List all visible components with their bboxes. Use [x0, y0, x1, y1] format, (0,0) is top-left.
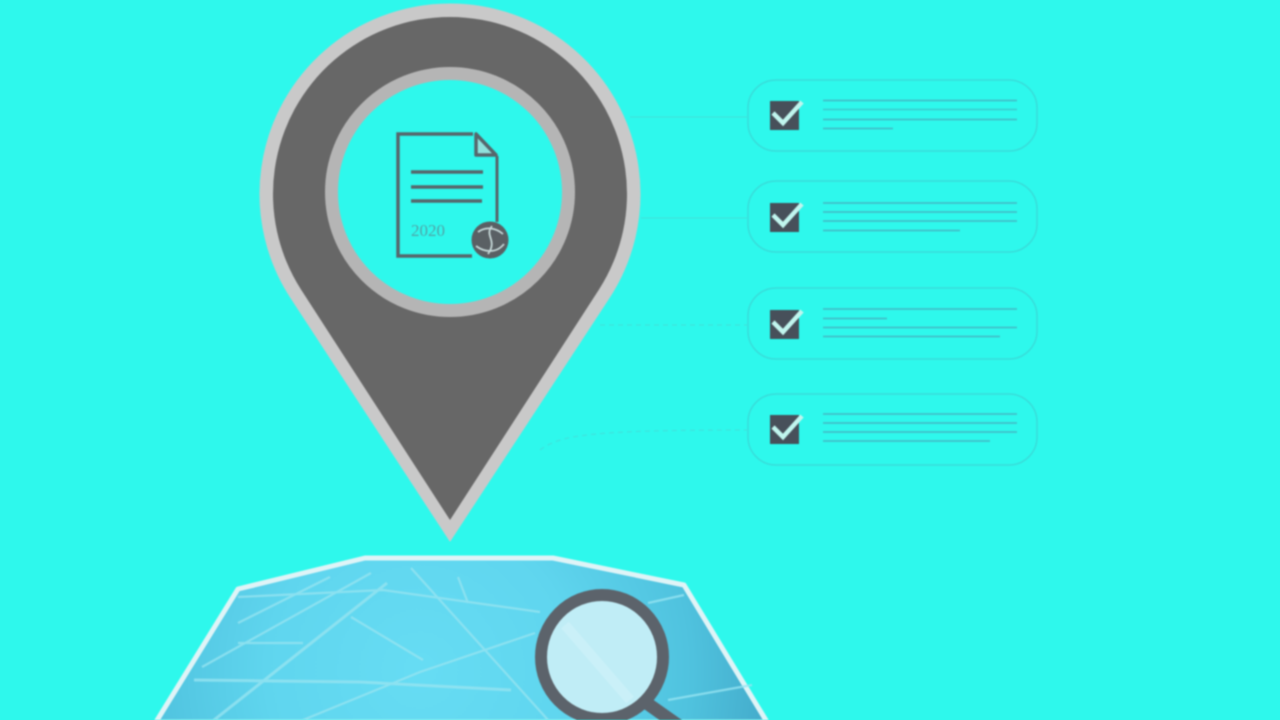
placeholder text lines	[823, 203, 1017, 230]
icon: checkbox	[770, 310, 802, 339]
card outline	[748, 80, 1037, 151]
document year: 2020	[411, 221, 445, 240]
map roads	[194, 568, 752, 720]
placeholder text lines	[823, 414, 1017, 441]
placeholder text lines	[823, 100, 1017, 128]
pin inner ring	[332, 74, 568, 310]
icon: document with seal	[398, 134, 508, 258]
card outline	[748, 288, 1037, 359]
pin silver outline	[260, 4, 640, 541]
icon: checkbox	[770, 203, 802, 232]
checklist item 2	[748, 181, 1037, 252]
map with search magnifier	[156, 558, 767, 720]
checklist item 4	[748, 394, 1037, 465]
placeholder text lines	[823, 309, 1017, 336]
checklist item 1	[748, 80, 1037, 151]
card outline	[748, 394, 1037, 465]
seal	[472, 222, 508, 258]
icon: checkbox	[770, 101, 802, 130]
card outline	[748, 181, 1037, 252]
icon: checkbox	[770, 415, 802, 444]
pin dark body	[273, 17, 627, 520]
icon: magnifier	[541, 595, 682, 720]
map surface	[156, 558, 767, 720]
location pin	[260, 4, 640, 541]
checklist item 3	[748, 288, 1037, 359]
connector lines	[540, 117, 747, 450]
